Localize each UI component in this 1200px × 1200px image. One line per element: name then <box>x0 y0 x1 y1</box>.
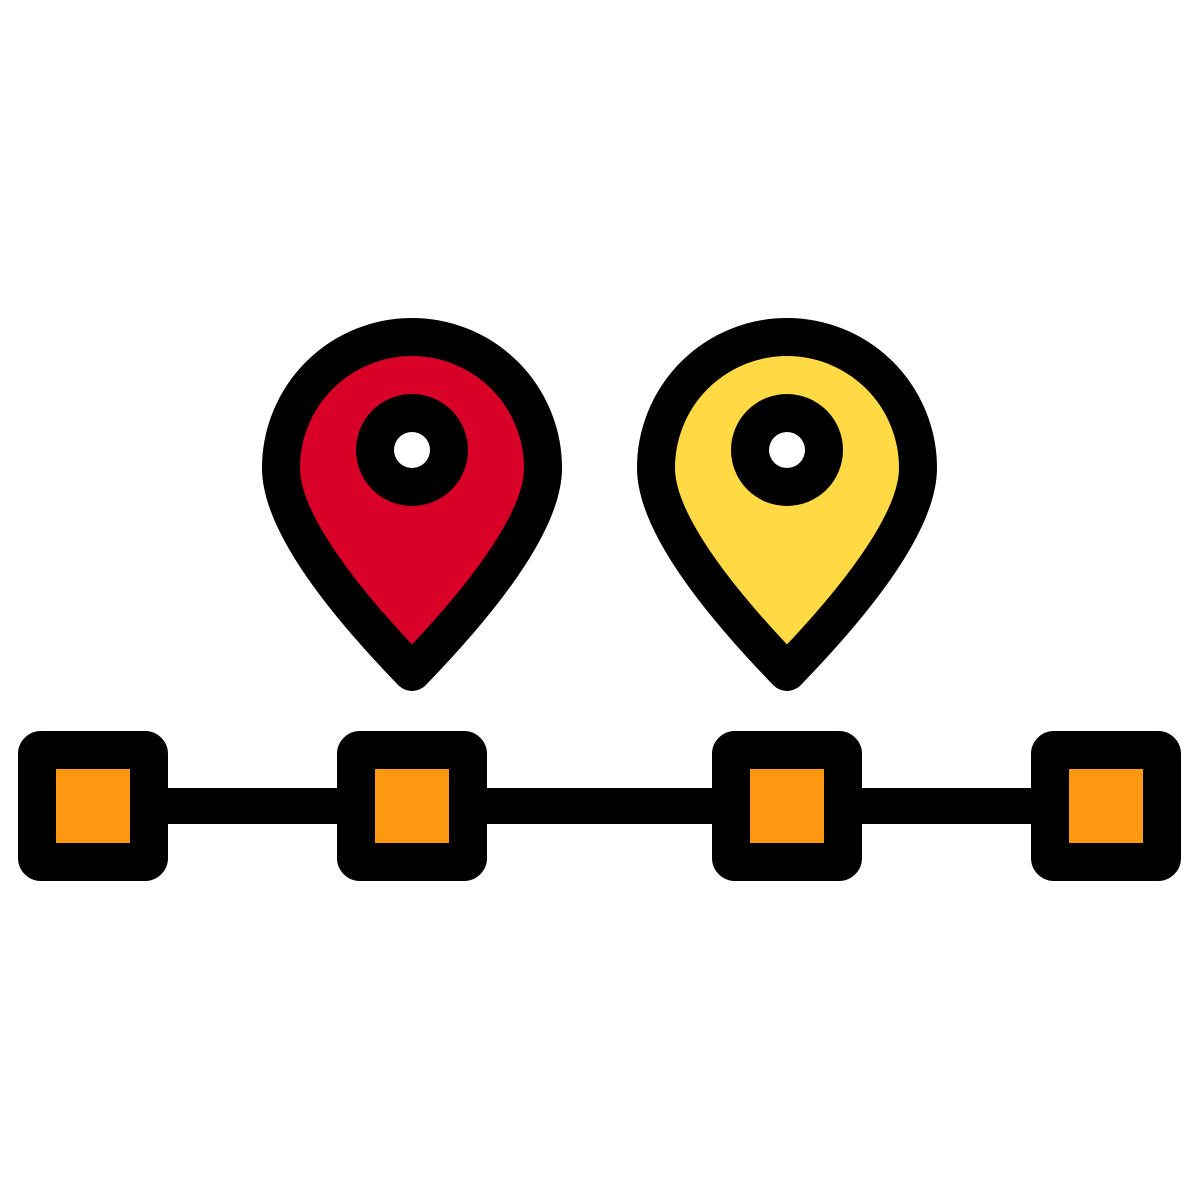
icon: yellow location pin <box>656 337 918 672</box>
route node 2 <box>356 750 468 862</box>
route node 1 <box>37 750 149 862</box>
route node 4 <box>1050 750 1162 862</box>
icon: red location pin <box>281 337 543 672</box>
connector line <box>160 788 1040 824</box>
route node 3 <box>731 750 843 862</box>
